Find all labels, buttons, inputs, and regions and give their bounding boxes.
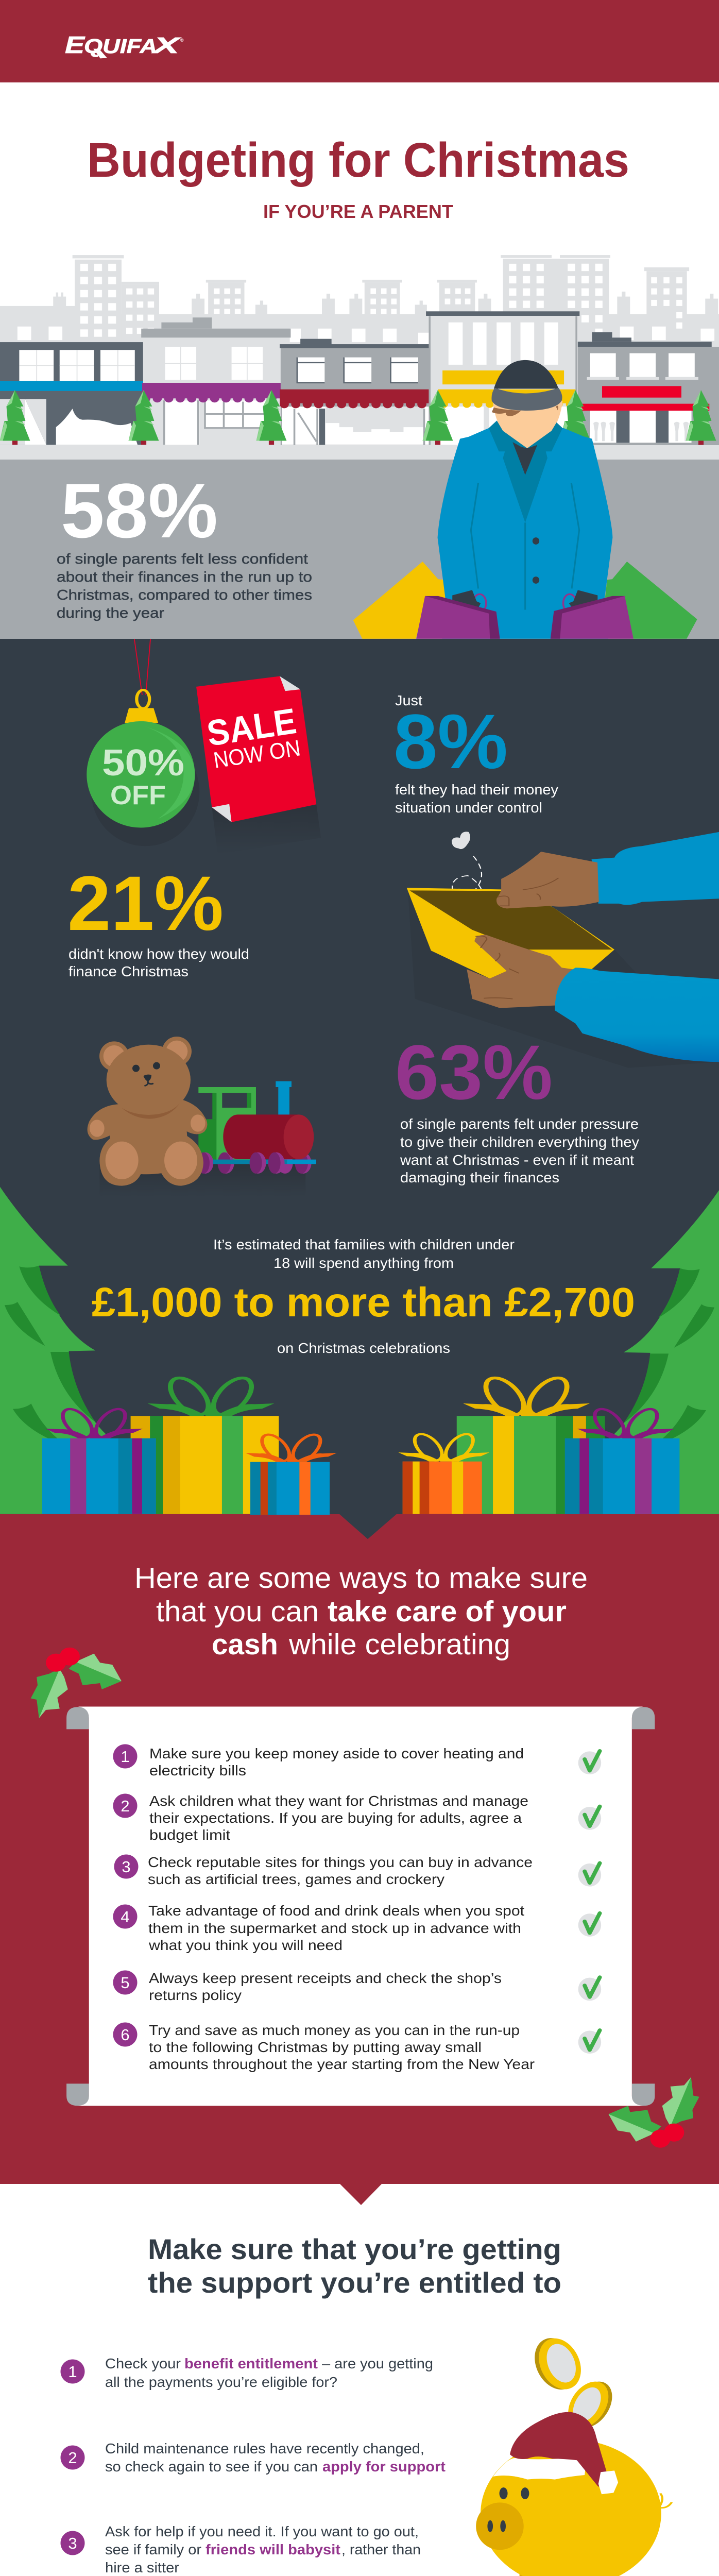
support item 2: apply for support [322,2459,446,2475]
icon: check marks [578,1751,601,2054]
item 5: 5 [121,1974,130,1992]
support item 2: Child maintenance rules have recently changed, [105,2441,424,2456]
item 5 [113,1970,502,2003]
support item 2: so check again to see if you can [105,2459,318,2475]
stat: 21%: 21% [67,860,224,946]
item 4 [113,1903,524,1953]
stat: 58%: 58% [61,467,218,554]
support item 1: Check your [105,2355,181,2371]
item 6: Try and save as much money as you can in the run-up [149,2022,520,2038]
item 1: 1 [121,1748,130,1766]
item 5: Always keep present receipts and check the shop’s [149,1970,502,1986]
skyline background [0,255,719,446]
heading: support entitled: Make sure that you’re getting [148,2233,561,2265]
stat: 21%: finance Christmas [69,963,189,979]
shop 5: red sign [578,332,719,446]
stat: 63%: to give their children everything they [400,1134,639,1150]
icon: sale poster [196,676,321,854]
gift: blue with purple [42,1407,156,1514]
stat text: Christmas, compared to other times [57,587,312,603]
toy train [197,1081,316,1174]
support item 3: Ask for help if you need it. If you want to go out, [105,2523,419,2539]
stat: 58% [57,467,312,621]
icon: bauble 50% off [87,639,199,846]
item 2: Ask children what they want for Christmas and manage [149,1793,528,1809]
item 4: them in the supermarket and stock up in advance with [148,1920,521,1936]
stat: 8% [393,692,558,816]
heading: take care of your cash: Here are some ways to make sure [134,1562,588,1595]
stat: 63%: 63% [395,1029,553,1115]
stat: 8%: Just [395,692,422,708]
support item 3: friends will babysit [206,2541,340,2557]
gift: large yellow [131,1375,279,1514]
support item 3: see if family or [105,2541,201,2557]
shop 3: red awning [280,339,438,446]
stat: 21% [67,860,249,979]
panel: dark statistics [0,639,719,1514]
support item 1: 1 [68,2363,77,2381]
illustration: hands opening empty wallet [407,832,719,1068]
illustration: man with shopping bags [353,360,697,639]
stat text: about their finances in the run up to [57,569,312,585]
header band [0,0,719,82]
right tree [561,1190,719,1514]
logo: Equifax: ® [180,38,184,43]
logo: Equifax: E [65,31,85,58]
support item 1: benefit entitlement [184,2355,318,2371]
support item 3 [61,2523,421,2575]
shop 4: yellow awning [426,311,579,446]
text: spend estimate: It’s estimated that families with children under [213,1236,515,1252]
street scene: shops [0,255,719,446]
item 6 [113,2022,535,2072]
heading: take care of your cash: take care of your [328,1595,567,1628]
stat: 63%: of single parents felt under pressure [400,1116,639,1132]
grey band [0,460,719,639]
heading: take care of your cash: while celebrating [288,1628,510,1661]
icon: holly top left [31,1648,122,1718]
icon: holly bottom right [608,2077,699,2148]
gift: blue right [565,1407,679,1514]
heading: support entitled [148,2233,561,2299]
stat: 63%: want at Christmas - even if it meant [400,1152,634,1168]
text: spend estimate [92,1236,635,1356]
support item 2 [61,2441,446,2475]
icon: bauble 50% off: OFF [110,781,166,810]
item 2 [113,1793,528,1843]
item 1: Make sure you keep money aside to cover heating and [149,1745,524,1761]
item 3 [114,1854,533,1887]
arrow: maroon pointer [339,2183,382,2205]
stat: 8%: situation under control [395,800,542,816]
logo: Equifax [65,31,184,58]
spend amount: £1,000 to more than £2,700 [92,1279,635,1325]
heading: take care of your cash [134,1562,588,1661]
item 3: Check reputable sites for things you can buy in advance [148,1854,533,1870]
panel: maroon tips background [0,1514,719,2184]
stat text [57,551,312,621]
item 4: what you think you will need [148,1937,343,1953]
item 6: 6 [121,2026,130,2044]
left tree [0,1187,158,1514]
stat text: of single parents felt less confident [57,551,308,567]
support item 3: hire a sitter [105,2560,179,2575]
item 1: electricity bills [149,1762,246,1778]
icon: sale poster: NOW ON [212,735,302,773]
stat: 8%: 8% [393,698,508,785]
item 6: to the following Christmas by putting away small [149,2039,482,2055]
illustration: piggy bank with santa hat [476,2336,672,2576]
gift: large green [457,1375,605,1514]
support item 1 [61,2355,433,2390]
stat: 63% [395,1029,639,1185]
item 4: Take advantage of food and drink deals when you spot [148,1903,524,1919]
teddy bear [88,1037,207,1186]
logo: Equifax: QUIFA [84,36,157,58]
item 6: amounts throughout the year starting from the New Year [149,2056,535,2072]
illustration: christmas trees and gifts [0,1187,719,1539]
heading: take care of your cash: that you can [156,1595,319,1628]
support item 3: , rather than [341,2541,421,2557]
subtitle: IF YOU’RE A PARENT [263,201,453,222]
text: spend estimate: 18 will spend anything from [273,1255,454,1271]
icon: sale poster: SALE [204,701,299,754]
logo: Equifax: X [151,33,181,58]
item 2: their expectations. If you are buying for adults, agree a [149,1810,522,1826]
arrow: section pointer [339,1514,397,1539]
panel: checklist scroll [66,1707,655,2106]
illustration: teddy bear and toy train [88,1037,316,1197]
title: Budgeting for Christmas [87,133,629,188]
heading: support entitled: the support you’re entitled to [148,2266,561,2299]
stat: 21%: didn't know how they would [69,946,249,962]
icon: christmas trees along street [0,390,716,445]
stat: 63%: damaging their finances [400,1170,559,1185]
stat: 8%: felt they had their money [395,782,558,798]
item 2: budget limit [149,1827,230,1843]
icon: bauble 50% off: 50% [102,742,184,784]
stat text: during the year [57,605,164,621]
support item 1: – are you getting [322,2355,433,2371]
support item 1: all the payments you’re eligible for? [105,2374,337,2390]
item 4: 4 [121,1908,130,1926]
heading: take care of your cash: cash [212,1628,278,1661]
support item 3: 3 [68,2534,77,2552]
support item 2: 2 [68,2449,77,2467]
item 3: 3 [122,1858,131,1876]
gift: small blue and orange [246,1432,337,1515]
text: spend estimate: on Christmas celebrations [277,1340,450,1356]
shop 2: purple awning [141,317,290,446]
item 3: such as artificial trees, games and crockery [148,1871,444,1887]
item 5: returns policy [149,1987,242,2003]
item 2: 2 [121,1797,130,1815]
pavement [0,445,719,460]
gift: small orange [398,1432,489,1514]
shop 1: blue awning [0,342,143,445]
item 1 [113,1744,524,1778]
